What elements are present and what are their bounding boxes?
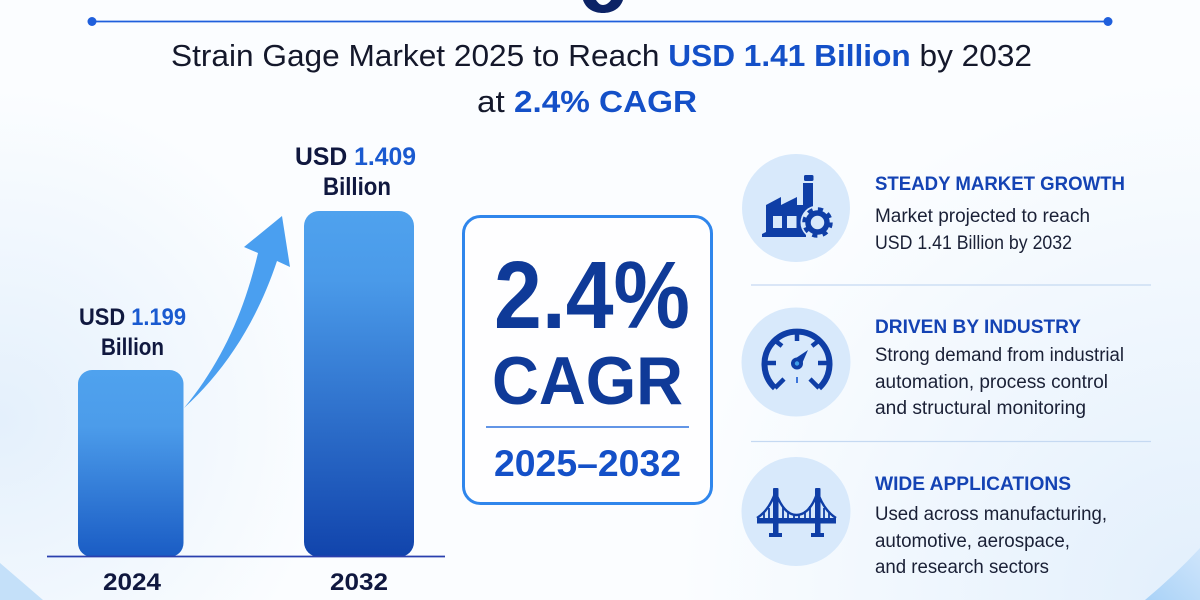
body text: Used across manufacturing, <box>875 504 1107 525</box>
value label 2032: Billion <box>323 173 391 201</box>
subtitle: at 2.4% CAGR <box>477 84 697 119</box>
year labels: 2024 <box>103 569 162 596</box>
value label 2024: Billion <box>101 334 164 361</box>
growth arrow <box>184 216 290 408</box>
body text: automation, process control <box>875 372 1108 393</box>
body text <box>875 504 1107 578</box>
year labels: 2032 <box>330 569 388 596</box>
body text: Market projected to reach <box>875 206 1090 227</box>
CAGR label: CAGR <box>492 343 683 419</box>
body text: USD 1.41 Billion by 2032 <box>875 233 1072 254</box>
heading: DRIVEN BY INDUSTRY <box>875 317 1081 338</box>
body text <box>875 345 1124 419</box>
panel: wide applications <box>742 457 1107 578</box>
title divider <box>88 17 1112 26</box>
body text: and structural monitoring <box>875 398 1086 419</box>
icon: factory with gear <box>742 154 850 262</box>
value label 2024 <box>79 304 186 361</box>
icon: bridge <box>742 457 850 566</box>
body text <box>875 206 1090 254</box>
body text: Strong demand from industrial <box>875 345 1124 366</box>
value label 2032 <box>295 143 416 201</box>
subtitle <box>171 38 1032 119</box>
bar 2032 <box>304 211 414 557</box>
bar chart <box>47 143 445 596</box>
CAGR period: 2025–2032 <box>494 443 681 484</box>
CAGR value: 2.4% <box>494 242 690 349</box>
value label 2032: USD 1.409 <box>295 143 416 171</box>
heading: WIDE APPLICATIONS <box>875 474 1071 495</box>
value label 2024: USD 1.199 <box>79 304 186 331</box>
subtitle: Strain Gage Market 2025 to Reach USD 1.41 Billion by 2032 <box>171 38 1032 73</box>
body text: automotive, aerospace, <box>875 531 1070 552</box>
title fragment: cropped heading descender <box>583 0 623 13</box>
panel: CAGR callout <box>464 216 712 504</box>
axis line <box>47 556 445 558</box>
panel: steady market growth <box>742 154 1125 262</box>
body text: and research sectors <box>875 557 1049 578</box>
bar 2024 <box>78 370 184 557</box>
year labels <box>103 569 388 596</box>
panel: driven by industry <box>742 308 1124 419</box>
icon: gauge <box>742 308 850 416</box>
heading: STEADY MARKET GROWTH <box>875 174 1125 195</box>
